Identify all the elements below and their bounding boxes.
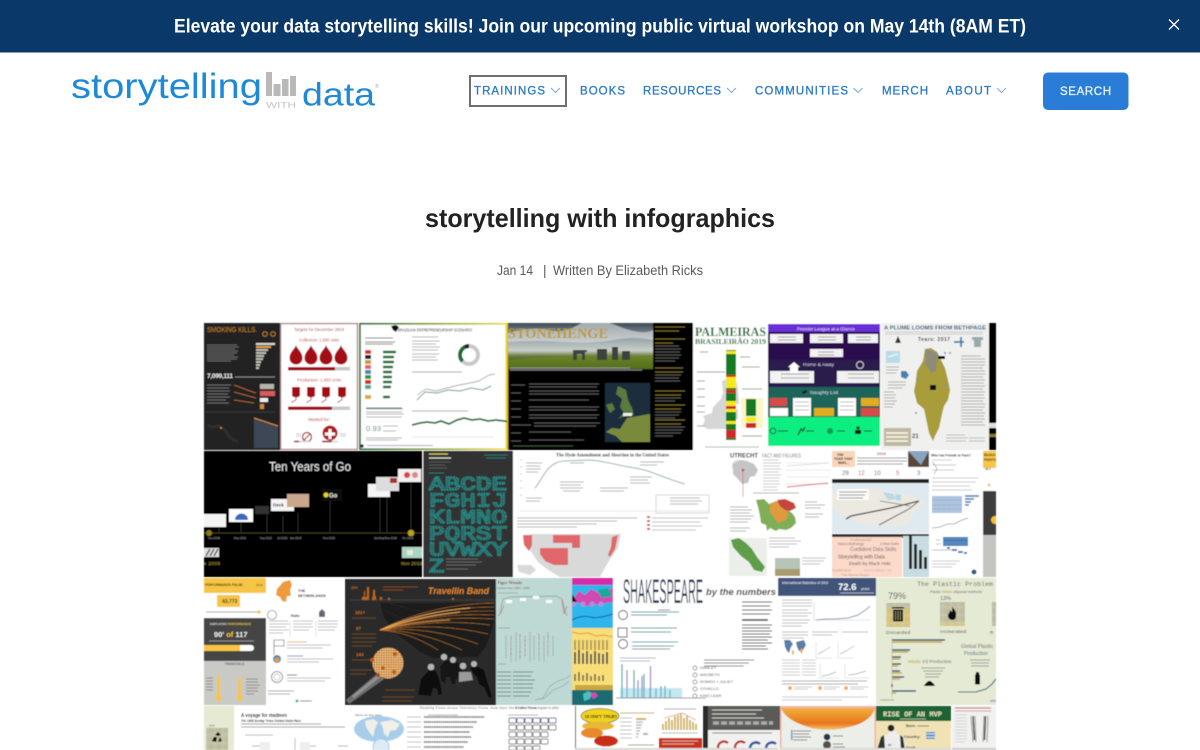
- tile: business edge: PERFO: [984, 458, 996, 462]
- navigation: BOOKS: [580, 86, 625, 98]
- tile: the plastic problem: 13%: [940, 596, 951, 602]
- tile: shakespeare: by the numbers: [706, 587, 776, 598]
- tile: the plastic problem: 79%: [888, 591, 906, 601]
- tile: premier league: Naughty List: [810, 390, 839, 395]
- tile: the year that: Storytelling with Data: [838, 554, 885, 560]
- tile: shakespeare: OTHELLO: [700, 686, 719, 691]
- line chart: [814, 602, 870, 620]
- map of britain: [605, 383, 650, 442]
- tile: smoking kills: 7,099,111: [207, 373, 233, 380]
- tile: the year that: 29: [842, 471, 849, 477]
- tile: performance pulse: EMPLOYEE PERFORMANCE: [210, 622, 251, 626]
- title: storytelling with infographics: [425, 203, 775, 233]
- tile: alphabet dots: UVWXY: [429, 540, 508, 562]
- tile: hand drawn sketch: [702, 705, 781, 750]
- tile: the year that: 5: [896, 471, 900, 477]
- tile: utrecht: UTRECHT: [730, 452, 758, 460]
- dot line: [412, 418, 510, 425]
- tile: the year that: 2019: [877, 451, 887, 456]
- tile: the year that: The Phoenix Project: [842, 573, 869, 577]
- tile: orange planet: [779, 706, 877, 749]
- tile: palmeiras: BRASILEIRÃO 2019: [695, 337, 766, 346]
- tile: tiger woods: [495, 578, 573, 706]
- tile: ten years of go: Nov 2008: [208, 536, 220, 540]
- tile: it isn't true: IS ISN'T TRUE!: [585, 714, 617, 719]
- dot bars: [424, 717, 484, 747]
- tile: ten years of go: [203, 450, 423, 578]
- band photo: [418, 654, 492, 699]
- tile: ten years of go: Nov 2015: [323, 536, 335, 540]
- tile: performance pulse: [203, 577, 267, 706]
- tile: stonehenge: [506, 322, 694, 451]
- tile: travellin band: [344, 578, 497, 706]
- tile: ten years of go: Ten Years of Go: [269, 460, 351, 474]
- tile: the year that: WHO...: [838, 461, 849, 465]
- tile: plume from bethpage: A PLUME LOOMS FROM BETHPAGE: [884, 326, 986, 332]
- outlined bars: [509, 718, 556, 723]
- tile: business edge: [982, 450, 997, 578]
- us route map: [832, 483, 929, 533]
- tile: the netherlands: [265, 577, 345, 705]
- tile: the year that: 12: [858, 471, 865, 477]
- tile: shakespeare: KING LEAR: [700, 693, 721, 698]
- tile: who has friends: [928, 451, 984, 575]
- logo: storytelling: [71, 67, 262, 106]
- tile: rise of an mvp: Draft: [906, 745, 916, 750]
- next row peek: [575, 748, 951, 750]
- tile: colorful dashboard: [571, 577, 614, 706]
- tile: ten years of go: Oct 2019: [402, 536, 414, 540]
- donut chart: [460, 346, 478, 364]
- logo: data: [302, 76, 375, 112]
- navigation: COMMUNITIES: [755, 86, 848, 98]
- tile: performance pulse: 43,773: [222, 599, 238, 605]
- icon: close: [1169, 20, 1179, 30]
- navigation: [470, 76, 1006, 106]
- tile: alphabet dots: FGHIJ: [429, 490, 507, 512]
- tile: utrecht: FACT AND FIGURES: [762, 454, 802, 460]
- tile: the plastic problem: The Plastic Problem: [917, 581, 993, 588]
- tile: shakespeare: HAMLET: [700, 665, 717, 670]
- flight fan: [380, 603, 494, 650]
- olive plume map: [914, 348, 950, 441]
- tile: palmeiras: PALMEIRAS: [695, 325, 766, 339]
- tile: the plastic problem: Production: [964, 651, 988, 657]
- tile: tiger woods: Tiger Woods: [497, 580, 522, 585]
- tile: the year that: A New Earth: [880, 542, 899, 546]
- black bars chart: [903, 536, 929, 577]
- tile: performance pulse: 90' of 117: [214, 630, 248, 639]
- tile: smoking kills: SMOKING KILLS.: [207, 327, 257, 334]
- tile: brazil entrepreneurship: [358, 322, 508, 451]
- post meta: |: [543, 263, 547, 278]
- icon: red cross: [323, 426, 338, 441]
- tile: ten years of go: Sep 2012: [260, 536, 272, 540]
- utrecht region map: [756, 499, 796, 531]
- scatter of results: [506, 632, 553, 662]
- tile: shakespeare: MACBETH: [700, 672, 720, 677]
- stonehenge photo: [508, 323, 653, 369]
- globe maps: Where are they going: [355, 713, 382, 717]
- tile: premier league: Premier League at a Glance: [797, 326, 855, 332]
- tile: the year that: Death by Black Hole: [849, 561, 891, 566]
- word cloud: [832, 537, 902, 577]
- line chart: [417, 374, 495, 395]
- waffle discarded: [886, 603, 910, 627]
- icon: house: [788, 362, 800, 373]
- player figure: [877, 731, 906, 750]
- tile: ten years of go: May 2011: [234, 536, 247, 540]
- tile: alphabet dots: KLMNO: [429, 507, 507, 529]
- navigation: RESOURCES: [643, 86, 721, 98]
- tile: the year that: Confident Data Skills: [850, 547, 897, 553]
- tile: the year that: 10: [874, 471, 881, 477]
- tile: the netherlands: THE: [298, 589, 306, 593]
- waffle incinerated: [940, 602, 965, 626]
- tile: blood targets: Production: 1,460 units: [297, 378, 342, 384]
- search button: [1043, 72, 1128, 110]
- tile: the netherlands: NETHERLANDS: [298, 594, 326, 598]
- tile: a voyage for madmen: Reading Fiona versus Television Fiona: How does the: [420, 706, 514, 710]
- tile: travellin band: Travellin Band: [428, 586, 489, 596]
- tile: a voyage for madmen: compare to other: [535, 706, 560, 710]
- tile: the plastic problem: view: [990, 698, 1000, 703]
- microphone: [346, 673, 384, 704]
- tile: annual bars: [658, 706, 703, 749]
- tile: ten years of go: Apr/Aug/Sep 2018: [374, 536, 397, 540]
- us map: [530, 534, 621, 577]
- tile: the year that: [831, 450, 930, 578]
- tile: hyde amendment: [512, 450, 710, 578]
- timeline cards: [204, 514, 226, 527]
- small results table: [741, 398, 763, 428]
- tile: blood targets: [280, 322, 359, 451]
- tile: it isn't true: [574, 705, 659, 748]
- tile: utrecht: [729, 452, 833, 578]
- tile: hyde amendment: The Hyde Amendment and Abortion in the United States: [556, 454, 669, 458]
- tile: the year that: World History 101: [864, 568, 892, 572]
- tile: performance pulse: FINANCIALS: [225, 662, 244, 666]
- tile: brazil entrepreneurship: BRAZILIAN ENTREPRENEURSHIP SCENARIO: [398, 328, 472, 332]
- tile: alphabet dots: Z: [429, 556, 444, 578]
- tile: travellin band: 181+: [355, 610, 366, 615]
- tile: ten years of go: Nov 2019: [401, 561, 422, 566]
- tile: the year that: 3: [917, 471, 921, 477]
- nav focus box: [470, 76, 566, 106]
- tile: tiger woods: Career from 1994 - 2009: [497, 586, 530, 590]
- thermometers: [217, 676, 220, 697]
- tile: it isn't true: 200: [643, 732, 648, 736]
- tile: ten years of go: Go: [329, 494, 338, 500]
- tile: blood targets: Targets for December 2019: [294, 327, 344, 332]
- post meta: Jan 14: [497, 263, 533, 278]
- tile: green waste: [204, 706, 234, 750]
- tile: the year that: Southerland: [832, 568, 851, 572]
- icon: blood drops: [290, 345, 302, 364]
- tile: the plastic problem: Waste VS Production: [908, 659, 952, 664]
- tile: stonehenge: STONEHENGE: [508, 326, 608, 342]
- tile: smoking kills: [203, 322, 281, 451]
- tile: travellin band: 20+: [351, 585, 358, 590]
- green regional map: [729, 538, 767, 576]
- logo: WITH: [266, 100, 296, 110]
- tile: rise of an mvp: [875, 705, 952, 750]
- tile: the netherlands: Rutte: [291, 614, 300, 618]
- tile: rise of an mvp: RISE OF AN MVP: [883, 712, 942, 720]
- season strip: [726, 350, 736, 440]
- tile: a voyage for madmen: [240, 705, 576, 750]
- line chart: [535, 460, 685, 488]
- tile: brazil entrepreneurship: 0.93: [366, 424, 381, 433]
- tile: premier league: Home & Away: [803, 362, 835, 367]
- world map: [784, 640, 806, 653]
- tile: the plastic problem: R: [990, 630, 994, 636]
- tile: travellin band: 144: [356, 652, 364, 657]
- tile: blood targets: Wasted for:: [308, 417, 330, 423]
- tile: travellin band: 97: [356, 626, 362, 631]
- us map shadow: [381, 603, 495, 658]
- tile: premier league: [767, 323, 881, 447]
- bar chart: play words: [622, 664, 670, 698]
- tile: a voyage for madmen: Kindled Fiona: [515, 706, 536, 710]
- facts column: [655, 327, 685, 436]
- bar chart: concerts: [362, 587, 454, 600]
- tile: shakespeare: [612, 573, 779, 706]
- tile: the year that: Nazca Mythology: [838, 542, 864, 546]
- tile: ten years of go: Jul 2012: [277, 536, 288, 540]
- tile: international stats: years: [861, 587, 870, 591]
- search button: SEARCH: [1060, 86, 1111, 98]
- tile: plume from bethpage: [881, 322, 990, 451]
- tile: the plastic problem: Discarded: [886, 630, 910, 636]
- tile: plume from bethpage: Tears: 2017: [918, 337, 950, 343]
- tile: performance pulse: PERFORMANCE PULSE: [205, 583, 244, 587]
- tile: the plastic problem: Plastic Waste disposal methods: [930, 590, 982, 594]
- gray silhouette: [703, 379, 739, 429]
- tile: the plastic problem: Global Plastic: [961, 644, 994, 650]
- tile: a voyage for madmen: The 1968 Sunday Times Golden Globe Race: [241, 718, 302, 723]
- tile: business edge: Busine: [984, 453, 996, 457]
- tile: the plastic problem: Incinerated: [940, 629, 966, 635]
- tile: green waste: 8%: [209, 723, 215, 728]
- post meta: Written By Elizabeth Ricks: [553, 263, 703, 278]
- tile: ten years of go: v 2009: [204, 561, 220, 566]
- tile: the year that: YEAR THAT: [834, 457, 853, 461]
- announcement banner: [0, 0, 1200, 52]
- tile: who has friends: Who has Friends or Fans?: [931, 454, 971, 458]
- tile: international stats: [777, 577, 877, 706]
- navigation: ABOUT: [946, 86, 991, 98]
- tile: a voyage for madmen: A voyage for madmen: [241, 713, 287, 719]
- tile: rise of an mvp: Born: [906, 723, 916, 728]
- logo: [71, 67, 379, 112]
- tile: shakespeare: ROMEO + JULIET: [700, 679, 734, 684]
- icon: blood bags: [292, 387, 346, 398]
- tile: palmeiras: [692, 322, 769, 450]
- tile: rise of an mvp: 34: [888, 743, 892, 747]
- tile: alphabet dots: [422, 450, 514, 578]
- tile: ten years of go: Deck: [273, 502, 284, 508]
- tile: business edge: 43,7: [985, 467, 991, 471]
- tile: ten years of go: Apr 2014: [290, 536, 302, 540]
- tile: rise of an mvp: Country:: [904, 734, 921, 739]
- infographic collage: [204, 321, 1000, 750]
- tile: blood targets: Collection: 1,500 units: [299, 338, 340, 344]
- tile: international stats: International Statistics of 2019: [782, 581, 828, 585]
- tile: the plastic problem: [875, 578, 1000, 706]
- tile: international stats: 72.6: [838, 582, 856, 593]
- tile: plume from bethpage: 21: [912, 434, 919, 440]
- bar chart: waste vs production: [892, 640, 945, 693]
- tile: alphabet dots: ABCDE: [429, 474, 507, 496]
- tile: pale charts: [951, 706, 996, 750]
- tile: black edge: [988, 322, 997, 451]
- logo: ®: [375, 83, 379, 90]
- navigation: MERCH: [882, 86, 928, 98]
- logo bars: [266, 72, 296, 96]
- blue stacked bars: [932, 496, 962, 513]
- tile: performance pulse: 2019: [256, 583, 263, 587]
- banner text: Elevate your data storytelling skills! Join our upcoming public virtual workshop on May 14th (8AM ET): [174, 16, 1026, 38]
- navigation: TRAININGS: [474, 86, 545, 98]
- tile: the year that: THE: [837, 453, 844, 457]
- tile: alphabet dots: PQRST: [429, 524, 507, 546]
- tile: the year that: Truthmarket: [850, 537, 872, 542]
